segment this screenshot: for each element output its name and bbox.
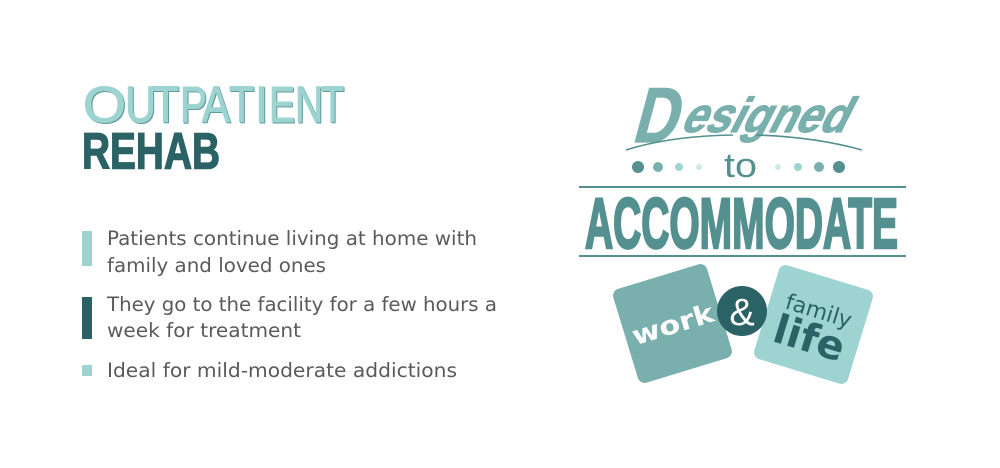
title: outpatient: E	[269, 76, 295, 133]
card: work: work	[629, 299, 718, 352]
title: outpatient: T	[229, 76, 254, 133]
title: outpatient: I	[255, 76, 268, 133]
text block: living at home	[107, 227, 477, 277]
card: family life	[752, 263, 875, 386]
bullet marker 3	[82, 365, 92, 376]
ampersand badge	[717, 286, 767, 336]
text block: ideal for: Ideal for mild-moderate addictions	[107, 359, 457, 382]
bullet marker 1	[82, 231, 92, 266]
text block: living at home: Patients continue living at home with	[107, 227, 477, 250]
heading: designed script: D	[627, 71, 694, 159]
card: family life: life	[768, 306, 850, 371]
title: outpatient: P	[180, 76, 207, 133]
panel: outpatient rehab description	[82, 76, 497, 382]
title: outpatient: A	[202, 76, 230, 133]
title: outpatient: O	[83, 76, 126, 133]
text block: facility hours: They go to the facility for a few hours a	[106, 293, 497, 316]
card: family life: family	[782, 290, 855, 334]
bullet marker 2	[82, 297, 92, 339]
text block: facility hours: week for treatment	[107, 319, 301, 342]
heading: designed script	[627, 71, 866, 159]
dots right	[775, 161, 845, 173]
word: to: to	[724, 147, 757, 185]
swoosh under heading	[626, 135, 862, 150]
title: rehab: REHAB	[82, 122, 220, 180]
title: outpatient: U	[125, 76, 156, 133]
heading: designed script: esigned	[673, 89, 866, 143]
dots left	[632, 161, 702, 173]
text block: facility hours	[106, 293, 497, 342]
title: outpatient: T	[321, 76, 344, 133]
bottom rule	[579, 255, 906, 257]
panel: designed to accommodate	[579, 71, 906, 386]
title: outpatient: T	[152, 76, 179, 133]
title: outpatient	[83, 76, 344, 133]
ampersand badge: &	[729, 292, 755, 334]
card: work	[611, 262, 734, 385]
top rule	[579, 186, 906, 188]
title: outpatient: N	[295, 76, 323, 133]
text block: living at home: family and loved ones	[107, 254, 326, 277]
